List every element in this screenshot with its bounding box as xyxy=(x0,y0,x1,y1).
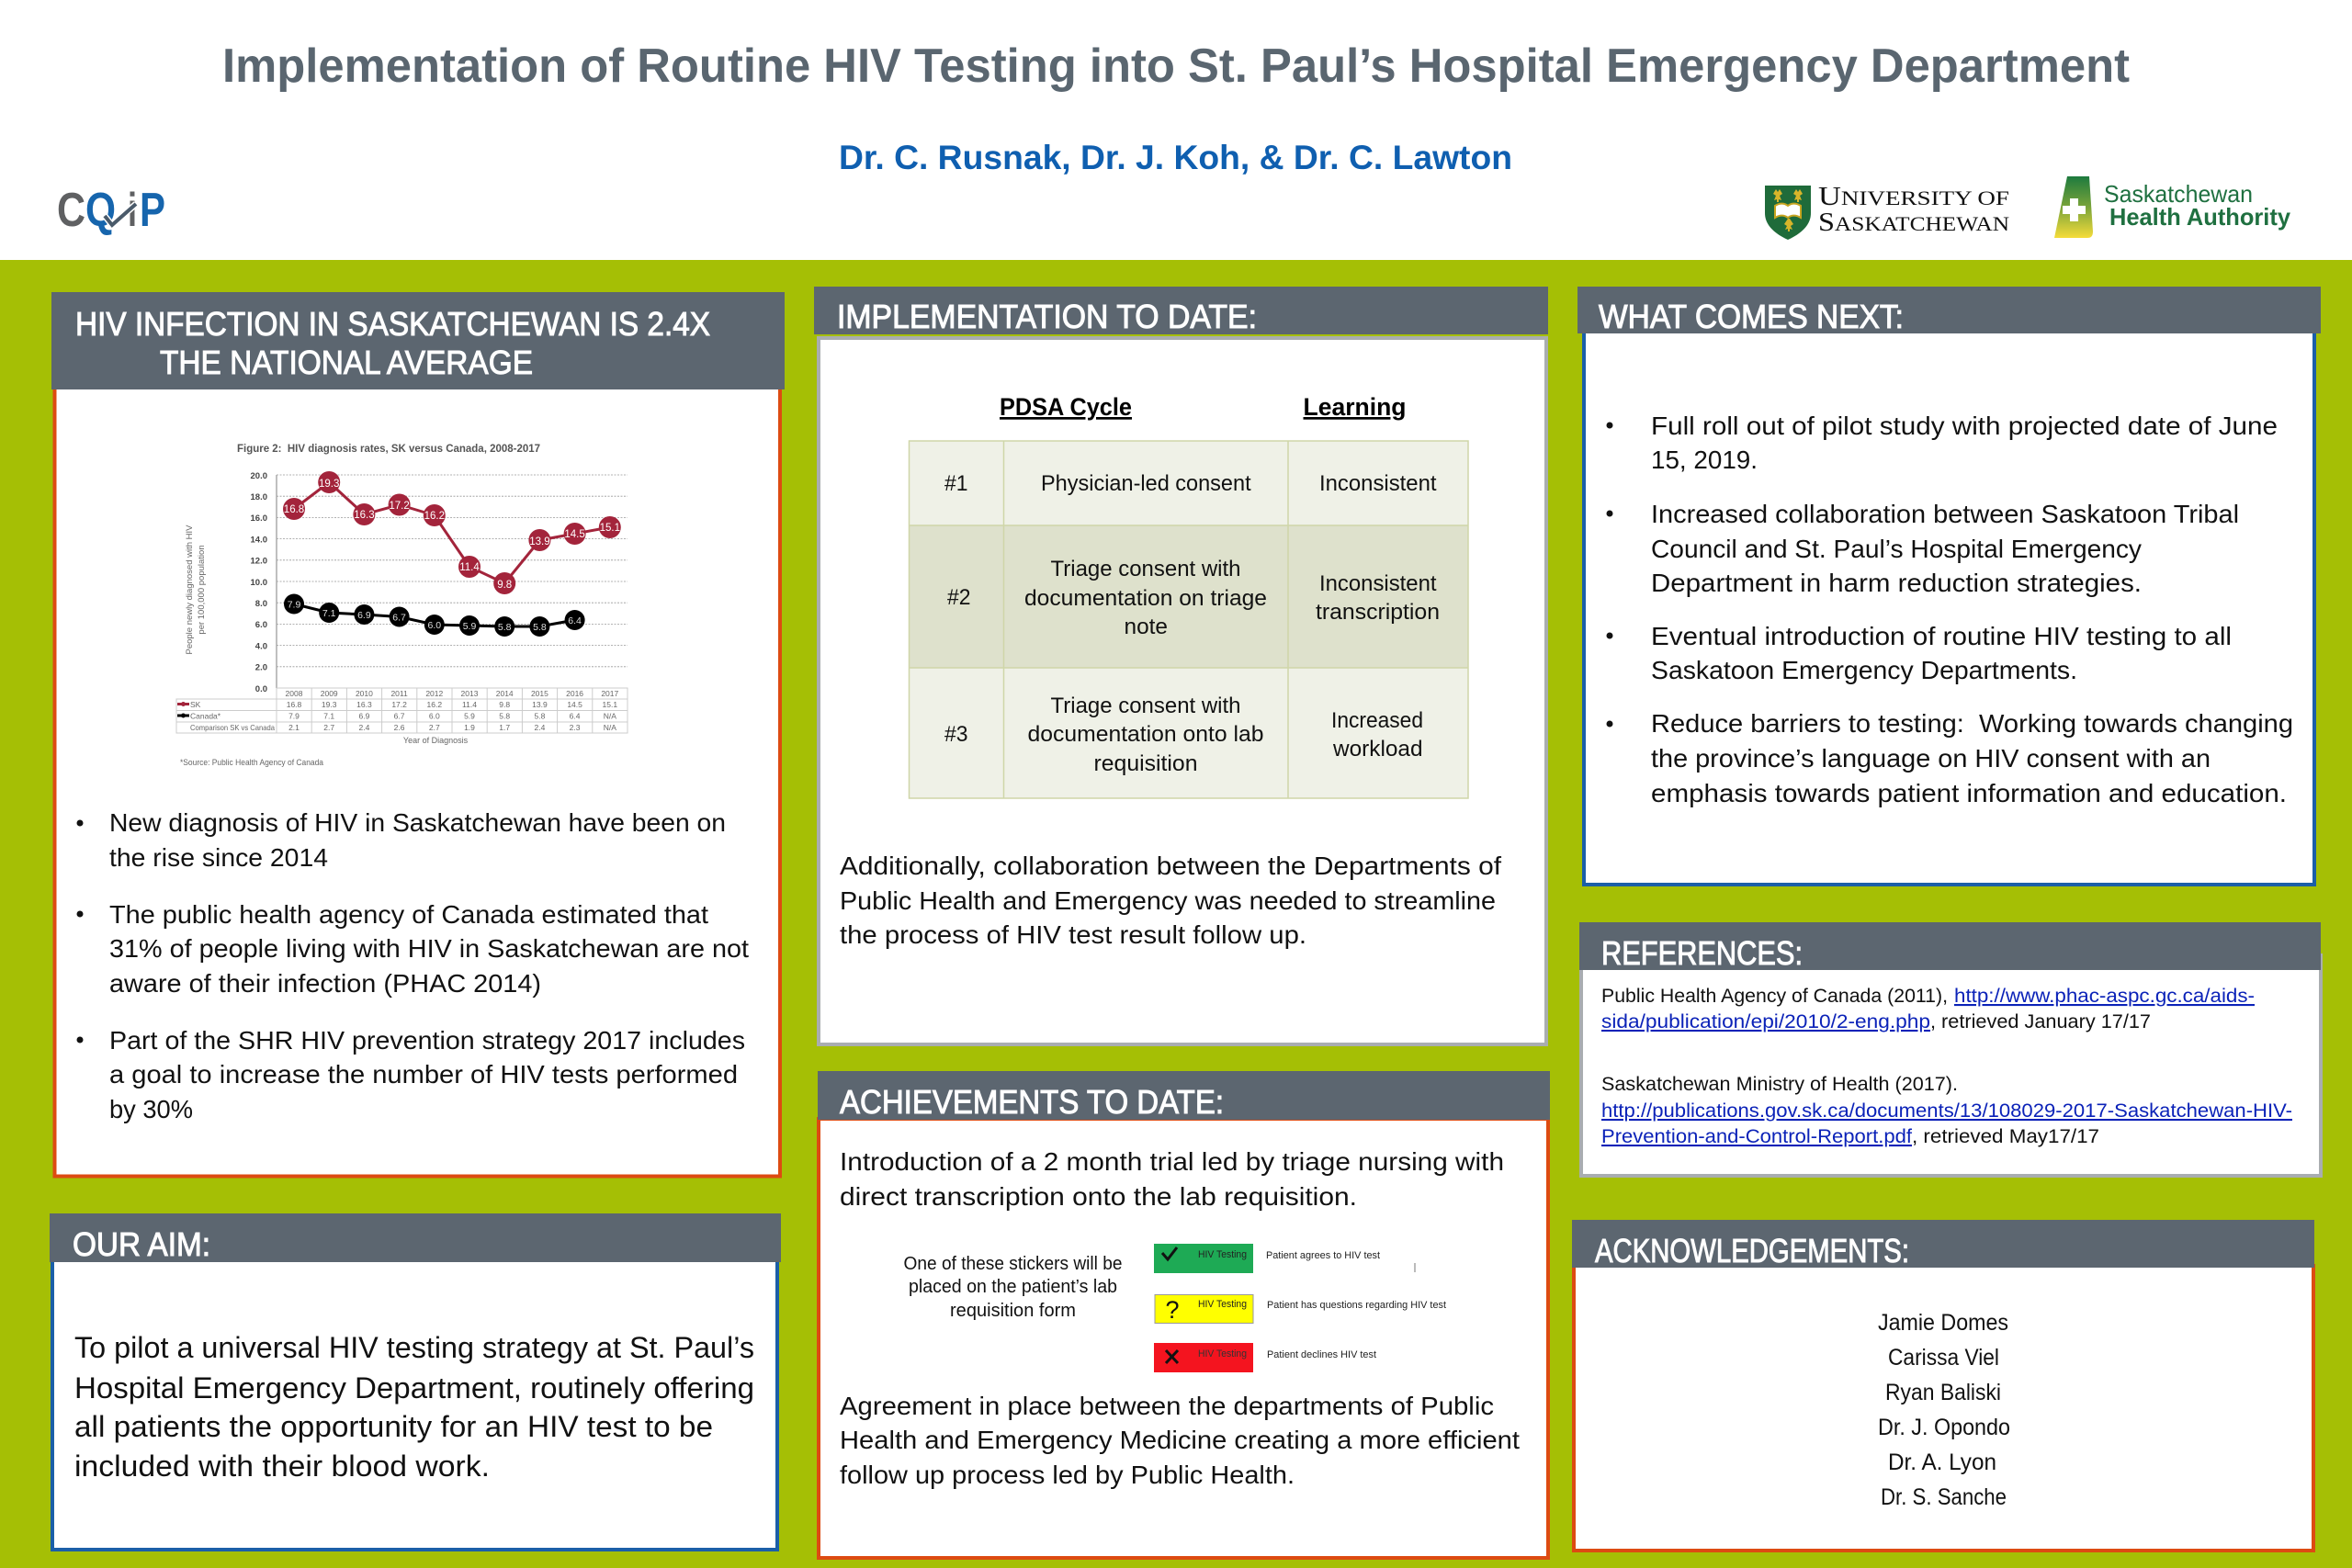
next steps list xyxy=(1606,412,2293,807)
data table: 2.3 xyxy=(570,723,581,732)
SK series: 17.2 xyxy=(389,501,410,512)
data table: 2.7 xyxy=(323,723,334,732)
data table: 2.4 xyxy=(534,723,546,732)
title: Implementation of Routine HIV Testing into St. Paul’s Hospital Emergency Department xyxy=(222,39,2130,93)
implementation note: Additionally, collaboration between the Departments of xyxy=(840,852,1501,880)
sticker: declines: Patient declines HIV test xyxy=(1267,1349,1376,1360)
line chart: HIV diagnosis rates: 2.0 xyxy=(255,663,267,672)
data table: 7.1 xyxy=(323,711,334,720)
logo: CQIP xyxy=(57,184,165,237)
data table: 1.9 xyxy=(464,723,475,732)
Canada series: 5.8 xyxy=(533,622,547,633)
heading: OUR AIM: xyxy=(73,1225,210,1263)
data table: 16.2 xyxy=(427,700,442,709)
data table: 2010 xyxy=(356,689,373,698)
PDSA table: Triage consent with xyxy=(1051,694,1240,718)
data table: 2013 xyxy=(461,689,479,698)
PDSA table: Physician-led consent xyxy=(1041,471,1251,496)
data table: N/A xyxy=(604,723,616,732)
names: Dr. S. Sanche xyxy=(1881,1484,2007,1510)
reference list xyxy=(1601,986,2292,1147)
line chart: HIV diagnosis rates: 14.0 xyxy=(250,535,267,546)
line chart: HIV diagnosis rates: 0.0 xyxy=(255,684,267,694)
bullet list: a goal to increase the number of HIV tests performed xyxy=(109,1060,738,1089)
SK series: 19.3 xyxy=(319,479,339,490)
data table: 5.8 xyxy=(534,711,546,720)
sticker: agrees: Patient agrees to HIV test xyxy=(1266,1250,1380,1261)
data table: 16.8 xyxy=(287,700,302,709)
names: Dr. A. Lyon xyxy=(1888,1450,1996,1475)
aim text: To pilot a universal HIV testing strategy at St. Paul’s xyxy=(74,1331,754,1364)
Canada series: 5.9 xyxy=(463,621,476,632)
sticker explanation: placed on the patient’s lab xyxy=(909,1277,1117,1297)
logo: Saskatchewan Health Authority: Health Authority xyxy=(2109,203,2291,231)
SK series: 16.2 xyxy=(424,511,445,522)
next steps list: Eventual introduction of routine HIV testing to all xyxy=(1651,622,2232,650)
heading xyxy=(1579,922,2321,972)
line chart: HIV diagnosis rates: 20.0 xyxy=(250,471,267,481)
data table: 1.7 xyxy=(499,723,510,732)
table column headings xyxy=(1000,393,1406,421)
aim text: included with their blood work. xyxy=(74,1450,490,1483)
bullet list: Part of the SHR HIV prevention strategy 2017 includes xyxy=(109,1026,745,1055)
SK series: 16.3 xyxy=(354,510,375,521)
data table: 13.9 xyxy=(532,700,548,709)
heading: REFERENCES: xyxy=(1601,934,1803,972)
panel: implementation to date xyxy=(814,287,1548,1044)
line chart: HIV diagnosis rates: *Source: Public Health Agency of Canada xyxy=(180,758,323,767)
data table: 2014 xyxy=(496,689,514,698)
sticker explanation xyxy=(904,1254,1123,1321)
sticker: questions xyxy=(1155,1295,1446,1324)
bullet list: New diagnosis of HIV in Saskatchewan have been on xyxy=(109,808,726,837)
data table: Canada* xyxy=(190,711,221,720)
reference list: http://www.phac-aspc.gc.ca/aids- xyxy=(1954,986,2255,1007)
data table: 2009 xyxy=(321,689,338,698)
PDSA table: documentation on triage xyxy=(1024,586,1267,611)
names: Dr. J. Opondo xyxy=(1878,1415,2010,1440)
sticker: agrees xyxy=(1154,1244,1380,1273)
aim text xyxy=(74,1331,754,1483)
logo: CQIP: P xyxy=(140,184,165,237)
next steps list: emphasis towards patient information and education. xyxy=(1651,779,2287,807)
data table: 9.8 xyxy=(499,700,510,709)
data table: 6.9 xyxy=(358,711,370,720)
sticker explanation: requisition form xyxy=(950,1301,1076,1321)
heading: THE NATIONAL AVERAGE xyxy=(160,344,533,381)
heading: IMPLEMENTATION TO DATE: xyxy=(837,298,1257,335)
bullet list: the rise since 2014 xyxy=(109,843,328,872)
logo: CQIP: C xyxy=(57,184,85,237)
Canada series: 6.4 xyxy=(568,615,582,626)
heading: ACHIEVEMENTS TO DATE: xyxy=(840,1083,1224,1121)
data table: 6.7 xyxy=(394,711,405,720)
reference list: Saskatchewan Ministry of Health (2017). xyxy=(1601,1074,1958,1095)
data table: 2011 xyxy=(390,689,408,698)
heading xyxy=(818,1071,1550,1121)
line chart: HIV diagnosis rates: 4.0 xyxy=(255,641,267,652)
data table: 2.1 xyxy=(288,723,300,732)
data table: 7.9 xyxy=(288,711,300,720)
table column headings: Learning xyxy=(1303,393,1406,421)
icon: crest shield xyxy=(1765,186,1811,240)
data table: 2015 xyxy=(531,689,548,698)
achievement text: trial: direct transcription onto the lab requisition. xyxy=(840,1182,1357,1211)
achievement text: trial: Introduction of a 2 month trial led by triage nursing with xyxy=(840,1147,1504,1176)
line chart: HIV diagnosis rates xyxy=(176,442,628,767)
names xyxy=(1878,1310,2010,1510)
heading: HIV INFECTION IN SASKATCHEWAN IS 2.4X xyxy=(75,305,710,343)
achievement text: agreement: follow up process led by Public Health. xyxy=(840,1461,1295,1489)
next steps list: 15, 2019. xyxy=(1651,446,1758,474)
heading xyxy=(814,287,1548,335)
bullet list: aware of their infection (PHAC 2014) xyxy=(109,969,541,998)
logo: University of Saskatchewan: SASKATCHEWAN xyxy=(1818,209,2009,237)
logo: University of Saskatchewan: UNIVERSITY OF xyxy=(1818,183,2009,211)
sticker: questions: Patient has questions regarding HIV test xyxy=(1267,1300,1446,1311)
PDSA table: note xyxy=(1125,615,1168,639)
aim text: all patients the opportunity for an HIV test to be xyxy=(74,1410,713,1443)
line chart: HIV diagnosis rates: 12.0 xyxy=(250,557,267,566)
Canada series: 7.9 xyxy=(288,599,300,610)
sticker: questions: ? xyxy=(1165,1296,1180,1324)
panel: achievements to date xyxy=(818,1071,1550,1558)
sticker explanation: One of these stickers will be xyxy=(904,1254,1123,1274)
PDSA table: Inconsistent xyxy=(1319,571,1437,596)
data table xyxy=(176,688,628,733)
implementation note xyxy=(840,852,1501,949)
SK series xyxy=(283,471,621,594)
next steps list: Full roll out of pilot study with projected date of June xyxy=(1651,412,2278,440)
Canada series xyxy=(284,593,585,637)
reference list: , retrieved January 17/17 xyxy=(1930,1011,2151,1032)
sticker: questions: HIV Testing xyxy=(1198,1299,1247,1310)
reference list: Public Health Agency of Canada (2011), xyxy=(1601,986,1948,1007)
data table: 2012 xyxy=(425,689,444,698)
PDSA table: #2 xyxy=(947,585,970,610)
PDSA table: Increased xyxy=(1331,708,1423,733)
heading xyxy=(1572,1220,2314,1269)
data table: 6.0 xyxy=(429,711,440,720)
reference list: http://publications.gov.sk.ca/documents/13/108029-2017-Saskatchewan-HIV- xyxy=(1601,1100,2292,1122)
PDSA table: workload xyxy=(1332,737,1422,761)
sticker: agrees: HIV Testing xyxy=(1198,1249,1247,1260)
names: Jamie Domes xyxy=(1878,1310,2008,1336)
PDSA table: documentation onto lab xyxy=(1027,722,1264,747)
SK series: 11.4 xyxy=(459,562,480,573)
names: Ryan Baliski xyxy=(1885,1380,2001,1405)
data table: 19.3 xyxy=(322,700,337,709)
achievement text: agreement: Health and Emergency Medicine creating a more efficient xyxy=(840,1426,1520,1454)
logo: Saskatchewan Health Authority: Saskatchewan xyxy=(2104,180,2253,208)
line chart: HIV diagnosis rates: 10.0 xyxy=(250,578,267,588)
panel: our aim xyxy=(50,1213,781,1550)
SK series: 13.9 xyxy=(529,536,550,547)
heading: ACKNOWLEDGEMENTS: xyxy=(1595,1232,1909,1269)
data table: 2016 xyxy=(566,689,583,698)
data table: 2.7 xyxy=(429,723,440,732)
data table: N/A xyxy=(604,711,616,720)
data table: 2.4 xyxy=(358,723,370,732)
line chart: HIV diagnosis rates: People newly diagnosed with HIV xyxy=(185,525,195,655)
heading xyxy=(1577,287,2321,335)
next steps list: Reduce barriers to testing: Working towards changing xyxy=(1651,709,2293,738)
logo: University of Saskatchewan xyxy=(1765,183,2009,240)
next steps list: Saskatoon Emergency Departments. xyxy=(1651,656,2077,684)
data table: 2017 xyxy=(601,689,619,698)
next steps list: the province’s language on HIV consent with an xyxy=(1651,744,2211,773)
Canada series: 7.1 xyxy=(322,608,336,619)
bullet list: 31% of people living with HIV in Saskatchewan are not xyxy=(109,934,749,963)
data table: 15.1 xyxy=(603,700,617,709)
Canada series: 5.8 xyxy=(498,622,512,633)
reference list: sida/publication/epi/2010/2-eng.php xyxy=(1601,1011,1930,1032)
line chart: HIV diagnosis rates: 16.0 xyxy=(250,513,267,524)
next steps list: Council and St. Paul’s Hospital Emergency xyxy=(1651,535,2142,563)
heading: WHAT COMES NEXT: xyxy=(1599,298,1904,335)
heading xyxy=(50,1213,781,1263)
line chart: HIV diagnosis rates: 8.0 xyxy=(255,599,267,609)
PDSA table: #3 xyxy=(944,722,968,747)
PDSA table: Inconsistent xyxy=(1319,471,1437,496)
reference list: Prevention-and-Control-Report.pdf xyxy=(1601,1126,1912,1147)
data table: 11.4 xyxy=(462,700,477,709)
authors: Dr. C. Rusnak, Dr. J. Koh, & Dr. C. Lawton xyxy=(839,139,1512,176)
PDSA table: transcription xyxy=(1316,600,1440,625)
panel: what comes next xyxy=(1577,287,2321,885)
panel: HIV infection in Saskatchewan xyxy=(51,292,785,1176)
line chart: HIV diagnosis rates: 18.0 xyxy=(250,492,267,502)
PDSA table: requisition xyxy=(1093,751,1198,776)
Canada series: 6.7 xyxy=(392,612,406,623)
names: Carissa Viel xyxy=(1888,1345,1999,1371)
logo: CQIP: i xyxy=(128,184,137,237)
data table: Comparison SK vs Canada xyxy=(190,723,275,732)
line chart: HIV diagnosis rates: per 100,000 population xyxy=(197,545,207,635)
data table: 5.9 xyxy=(464,711,475,720)
PDSA table: Triage consent with xyxy=(1051,557,1240,581)
heading xyxy=(51,292,785,389)
PDSA table: #1 xyxy=(944,471,968,496)
line chart: HIV diagnosis rates: Year of Diagnosis xyxy=(403,736,469,745)
implementation note: the process of HIV test result follow up. xyxy=(840,920,1306,949)
panel: references xyxy=(1579,922,2321,1176)
next steps list: Increased collaboration between Saskatoon Tribal xyxy=(1651,500,2239,528)
SK series: 14.5 xyxy=(564,529,585,540)
aim text: Hospital Emergency Department, routinely offering xyxy=(74,1371,754,1404)
SK series: 16.8 xyxy=(284,504,304,515)
achievement text: agreement xyxy=(840,1392,1520,1489)
line chart: HIV diagnosis rates: 6.0 xyxy=(255,620,267,630)
data table: 17.2 xyxy=(391,700,407,709)
data table: 6.4 xyxy=(570,711,581,720)
data table: 5.8 xyxy=(499,711,510,720)
data table: 2.6 xyxy=(394,723,405,732)
SK series: 9.8 xyxy=(497,580,512,591)
sticker: declines: HIV Testing xyxy=(1198,1348,1247,1359)
next steps list: Department in harm reduction strategies. xyxy=(1651,569,2142,597)
data table: 2008 xyxy=(286,689,303,698)
implementation note: Public Health and Emergency was needed to streamline xyxy=(840,886,1496,915)
bullet list: The public health agency of Canada estimated that xyxy=(109,900,708,929)
PDSA table xyxy=(910,441,1468,798)
panel: acknowledgements xyxy=(1572,1220,2314,1551)
data table: 14.5 xyxy=(567,700,582,709)
achievement text: agreement: Agreement in place between the departments of Public xyxy=(840,1392,1494,1420)
Canada series: 6.9 xyxy=(357,610,371,621)
logo: CQIP: Q xyxy=(85,184,116,237)
data table: 16.3 xyxy=(356,700,372,709)
SK series: 15.1 xyxy=(600,523,620,534)
achievement text: trial xyxy=(840,1147,1504,1211)
logo: Saskatchewan Health Authority xyxy=(2054,176,2291,238)
Canada series: 6.0 xyxy=(427,620,441,631)
reference list: , retrieved May17/17 xyxy=(1912,1126,2099,1147)
bullet list xyxy=(77,808,749,1123)
line chart: HIV diagnosis rates: Figure 2: HIV diagnosis rates, SK versus Canada, 2008-2017 xyxy=(237,442,540,455)
bullet list: by 30% xyxy=(109,1095,193,1123)
sticker: declines xyxy=(1154,1343,1376,1372)
data table: SK xyxy=(190,700,201,709)
table column headings: PDSA Cycle xyxy=(1000,393,1132,421)
